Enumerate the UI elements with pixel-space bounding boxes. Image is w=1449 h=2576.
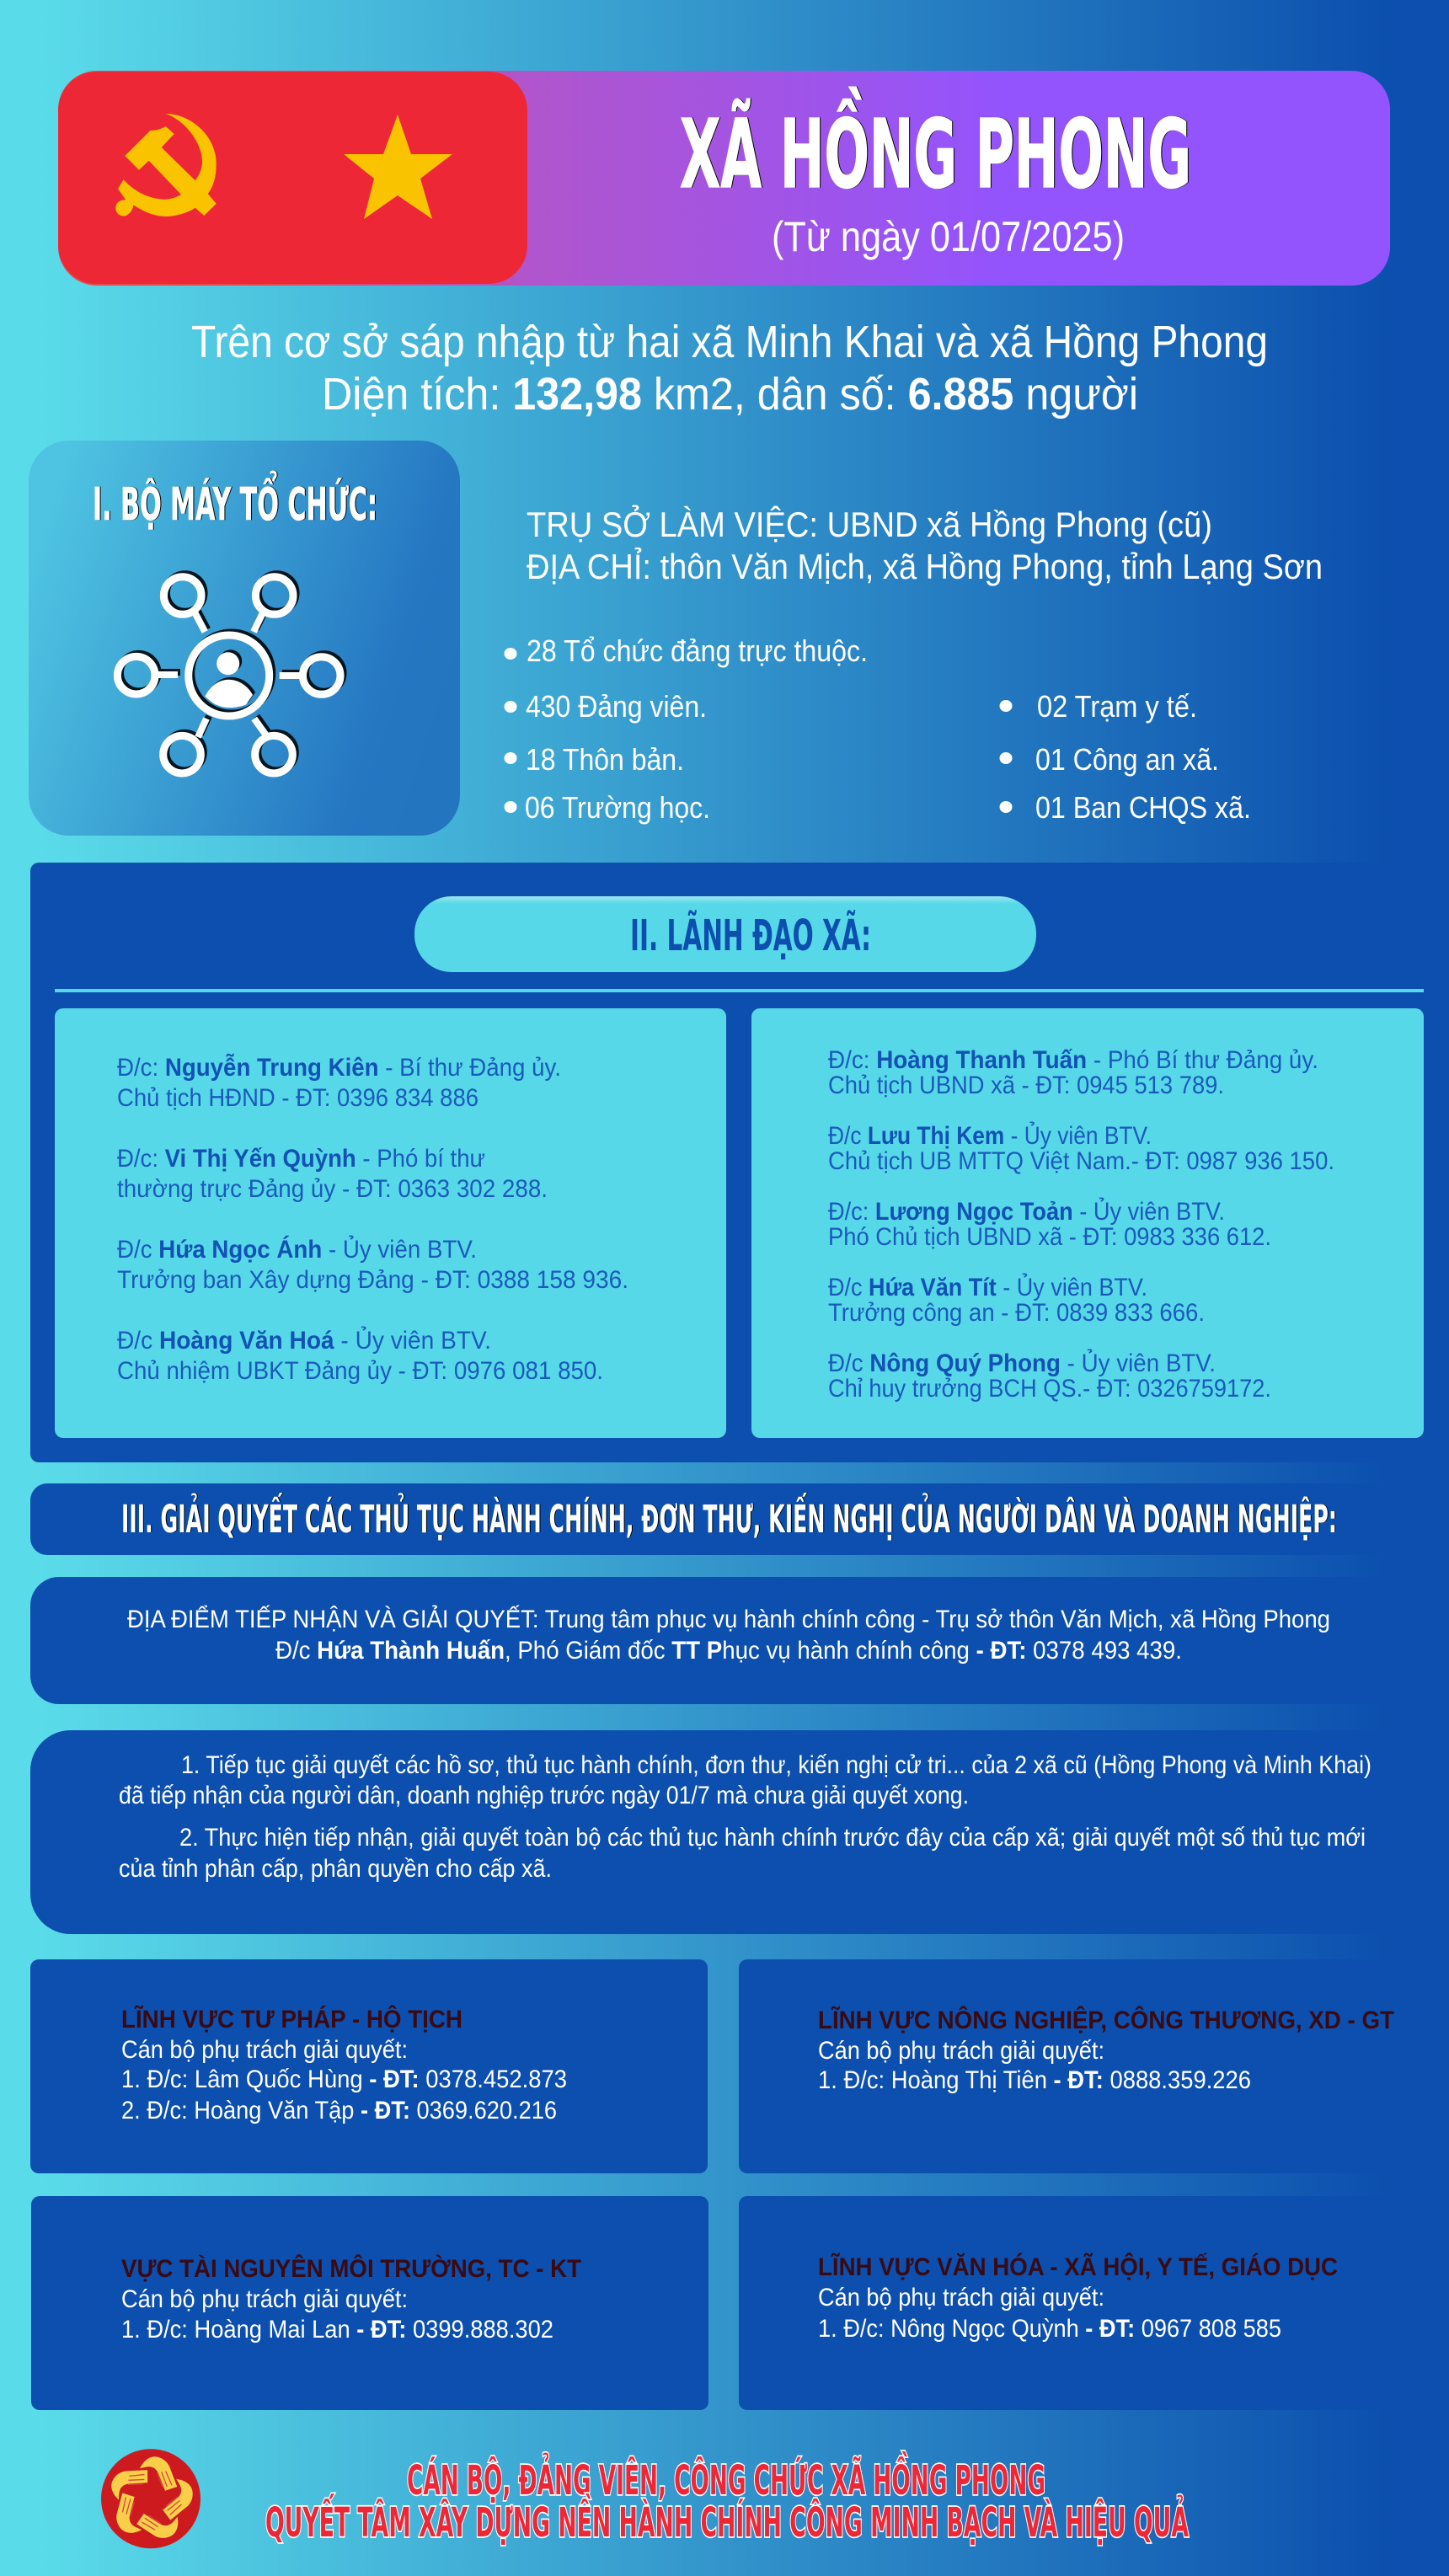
leader role line: Trưởng ban Xây dựng Đảng - ĐT: 0388 158 936. <box>117 1266 628 1294</box>
icon: hammer and sickle <box>115 114 217 216</box>
leader: Hứa Văn Tít: Đ/c Hứa Văn Tít - Ủy viên BTV. <box>828 1273 1147 1301</box>
icon: emblem with five hands <box>101 2449 201 2548</box>
leader role line: Chủ nhiệm UBKT Đảng ủy - ĐT: 0976 081 850. <box>117 1357 603 1385</box>
leader: Vi Thị Yến Quỳnh: Đ/c: Vi Thị Yến Quỳnh - Phó bí thư <box>117 1145 485 1173</box>
card subtitle: Cán bộ phụ trách giải quyết: <box>818 2037 1104 2065</box>
location line: ĐỊA ĐIỂM TIẾP NHẬN VÀ GIẢI QUYẾT: Trung tâm phục vụ hành chính công - Trụ sở thôn Văn Mịch, xã Hồng Phong <box>127 1605 1330 1633</box>
list text: 01 Công an xã. <box>1035 742 1219 777</box>
list text <box>525 633 1251 825</box>
card: environment <box>31 2196 708 2410</box>
heading II: II. LÃNH ĐẠO XÃ: <box>630 910 871 961</box>
icon: person network <box>117 577 340 773</box>
leader role line: thường trực Đảng ủy - ĐT: 0363 302 288. <box>117 1175 548 1203</box>
list text: 28 Tổ chức đảng trực thuộc. <box>527 633 868 668</box>
contact 1: 1. Đ/c: Lâm Quốc Hùng - ĐT: 0378.452.873 <box>121 2066 567 2093</box>
leader: Lương Ngọc Toản: Đ/c: Lương Ngọc Toản - Ủy viên BTV. <box>828 1197 1225 1226</box>
leader role line: Trưởng công an - ĐT: 0839 833 666. <box>828 1299 1205 1327</box>
contact 1: 1. Đ/c: Hoàng Thị Tiên - ĐT: 0888.359.226 <box>818 2066 1251 2094</box>
list text: 02 Trạm y tế. <box>1037 689 1197 724</box>
leader: Hứa Ngọc Ánh: Đ/c Hứa Ngọc Ánh - Ủy viên BTV. <box>117 1235 477 1264</box>
area and population line: Diện tích: 132,98 km2, dân số: 6.885 người <box>322 369 1138 420</box>
address block <box>527 504 1323 586</box>
card subtitle: Cán bộ phụ trách giải quyết: <box>121 2285 408 2313</box>
card: justice <box>30 1959 708 2173</box>
heading III bar <box>30 1483 1419 1555</box>
card subtitle: Cán bộ phụ trách giải quyết: <box>818 2284 1104 2311</box>
card title: LĨNH VỰC NÔNG NGHIỆP, CÔNG THƯƠNG, XD - GT <box>818 2006 1394 2034</box>
card: agriculture <box>739 1959 1415 2173</box>
leader role line: Phó Chủ tịch UBND xã - ĐT: 0983 336 612. <box>828 1223 1271 1251</box>
leader role line: Chủ tịch UB MTTQ Việt Nam.- ĐT: 0987 936 150. <box>828 1147 1334 1175</box>
address line: ĐỊA CHỈ: thôn Văn Mịch, xã Hồng Phong, tỉnh Lạng Sơn <box>527 546 1323 586</box>
leader: Lưu Thị Kem: Đ/c Lưu Thị Kem - Ủy viên BTV. <box>828 1121 1152 1150</box>
leader: Hoàng Văn Hoá: Đ/c Hoàng Văn Hoá - Ủy viên BTV. <box>117 1326 491 1355</box>
icon: yellow star <box>344 115 452 219</box>
panel: reception location <box>30 1577 1419 1704</box>
leader: Nguyễn Trung Kiên: Đ/c: Nguyễn Trung Kiên - Bí thư Đảng ủy. <box>117 1053 561 1082</box>
contact line: Đ/c Hứa Thành Huấn, Phó Giám đốc TT Phục vụ hành chính công - ĐT: 0378 493 439. <box>275 1637 1182 1665</box>
headquarters line: TRỤ SỞ LÀM VIỆC: UBND xã Hồng Phong (cũ) <box>527 504 1212 544</box>
panel: tasks <box>30 1730 1419 1934</box>
date subtitle: (Từ ngày 01/07/2025) <box>772 213 1125 260</box>
intro text <box>191 317 1268 420</box>
organisation list <box>504 633 1251 825</box>
task 1 continuation: đã tiếp nhận của người dân, doanh nghiệp trước ngày 01/7 mà chưa giải quyết xong. <box>119 1782 969 1809</box>
heading pill <box>414 896 1036 972</box>
panel background <box>30 863 1442 1462</box>
task 2 continuation: của tỉnh phân cấp, phân quyền cho cấp xã. <box>119 1855 552 1883</box>
card subtitle: Cán bộ phụ trách giải quyết: <box>121 2036 408 2064</box>
banner gradient bar <box>58 71 1390 286</box>
red flag panel <box>58 72 527 284</box>
list text: 18 Thôn bản. <box>526 742 684 777</box>
merger line: Trên cơ sở sáp nhập từ hai xã Minh Khai và xã Hồng Phong <box>191 317 1268 367</box>
list text: 430 Đảng viên. <box>526 689 707 724</box>
leader: Hoàng Thanh Tuấn: Đ/c: Hoàng Thanh Tuấn - Phó Bí thư Đảng ủy. <box>828 1046 1318 1074</box>
card title: LĨNH VỰC TƯ PHÁP - HỘ TỊCH <box>121 2005 463 2034</box>
list text: 06 Trường học. <box>525 790 710 825</box>
panel background <box>29 441 460 836</box>
panel: II. leadership <box>30 863 1442 1462</box>
leader role line: Chỉ huy trưởng BCH QS.- ĐT: 0326759172. <box>828 1375 1271 1403</box>
contact 1: 1. Đ/c: Nông Ngọc Quỳnh - ĐT: 0967 808 585 <box>818 2315 1281 2343</box>
leader: Nông Quý Phong: Đ/c Nông Quý Phong - Ủy viên BTV. <box>828 1349 1216 1377</box>
footer slogan <box>265 2451 1189 2547</box>
left leaders card <box>55 1008 726 1438</box>
leader role line: Chủ tịch UBND xã - ĐT: 0945 513 789. <box>828 1072 1224 1099</box>
bullet dots <box>504 648 1013 813</box>
panel: I. organisation <box>29 441 460 836</box>
list text: 01 Ban CHQS xã. <box>1035 790 1251 825</box>
leader role line: Chủ tịch HĐND - ĐT: 0396 834 886 <box>117 1084 479 1112</box>
card title: VỰC TÀI NGUYÊN MÔI TRƯỜNG, TC - KT <box>121 2254 581 2283</box>
heading I: I. BỘ MÁY TỔ CHỨC: <box>93 471 377 531</box>
card: culture <box>739 2196 1415 2410</box>
contact 1: 1. Đ/c: Hoàng Mai Lan - ĐT: 0399.888.302 <box>121 2316 553 2344</box>
banner <box>58 71 1390 286</box>
card title: LĨNH VỰC VĂN HÓA - XÃ HỘI, Y TẾ, GIÁO DỤC <box>818 2253 1338 2281</box>
contact 2: 2. Đ/c: Hoàng Văn Tập - ĐT: 0369.620.216 <box>121 2097 557 2124</box>
right leaders card <box>751 1008 1424 1438</box>
